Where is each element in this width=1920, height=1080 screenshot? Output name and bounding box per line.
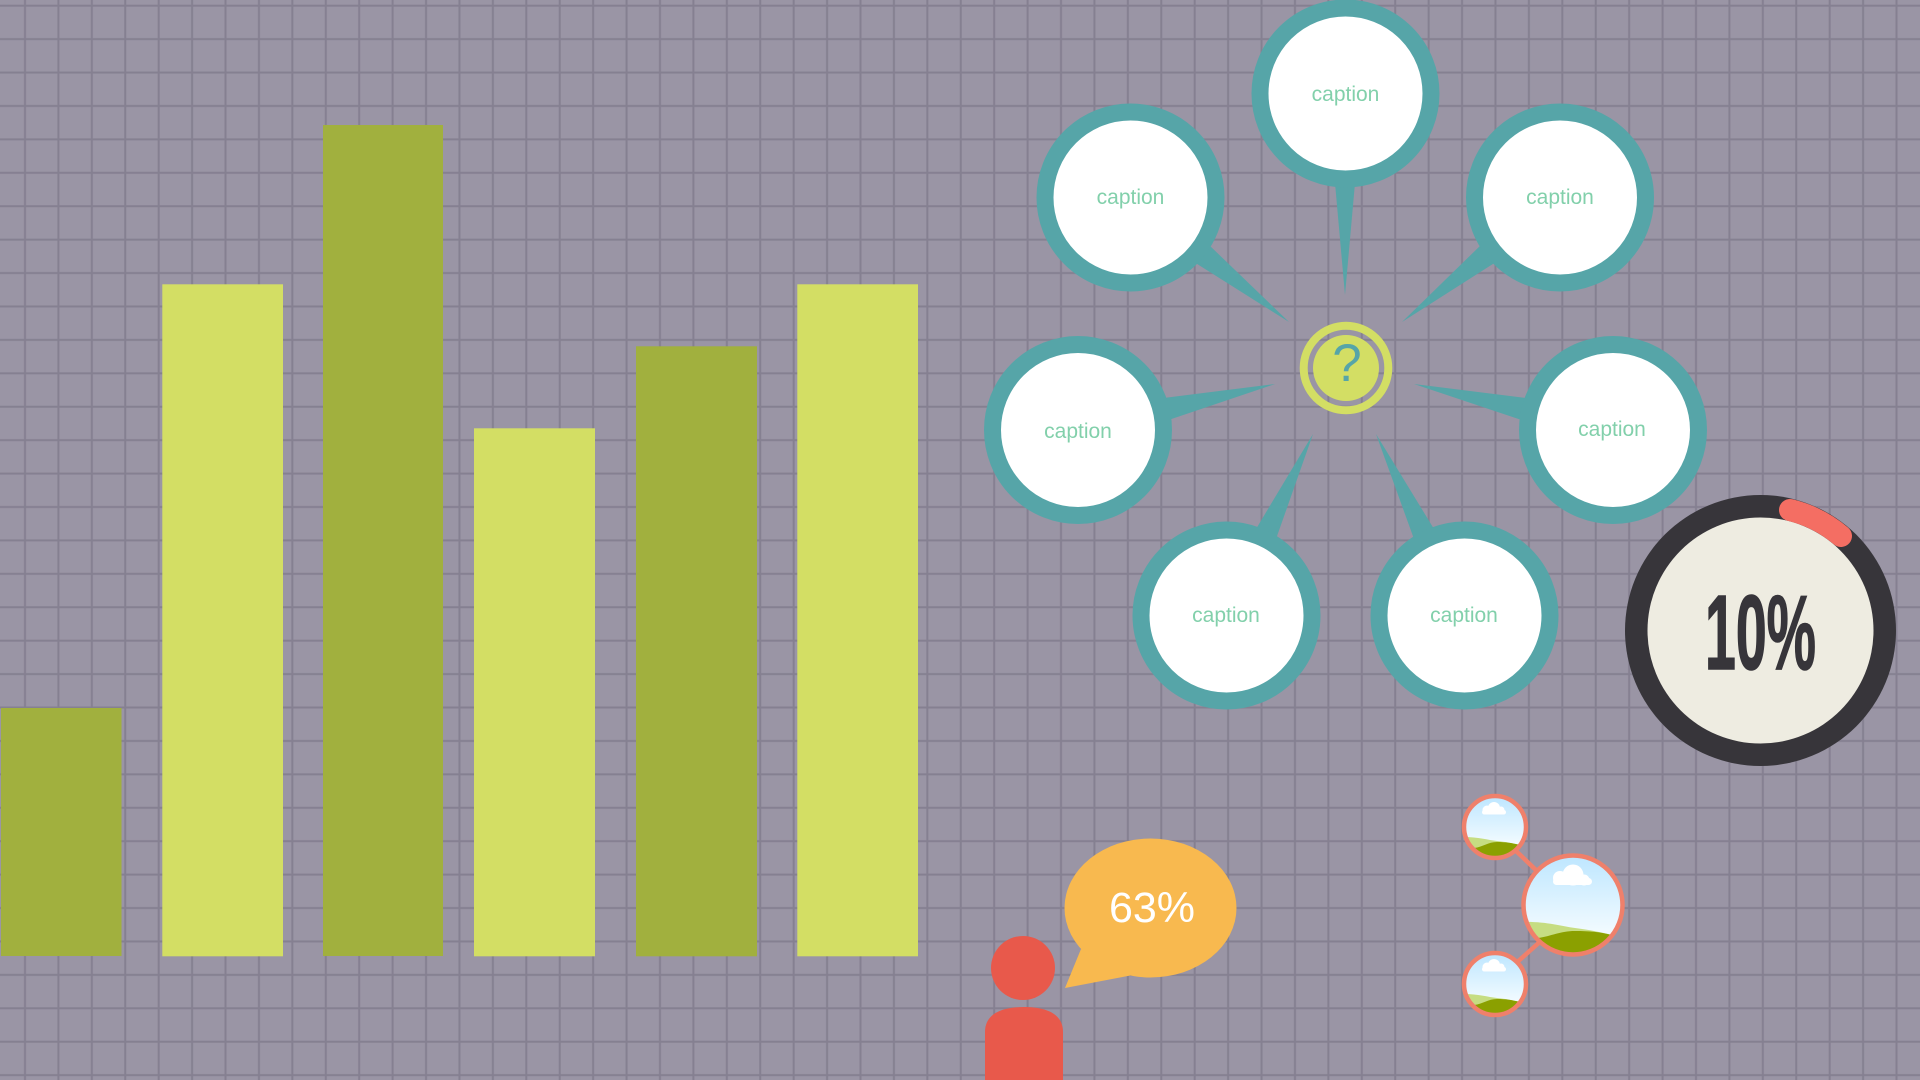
bar 2 [162,284,283,956]
bar 5 [636,346,757,956]
image network [1464,796,1623,1017]
bar 1 [1,708,122,956]
person with speech bubble [985,838,1236,1080]
bar 4 [474,428,595,956]
connectors [1515,850,1542,964]
caption bubble: bottom left [1141,434,1313,701]
caption bubble: right: caption [1578,418,1646,441]
caption bubble: bottom right: caption [1430,604,1498,627]
speech bubble [1064,838,1236,988]
gauge arc [1790,510,1841,536]
radial caption diagram [992,8,1698,701]
icon: person [985,936,1063,1080]
caption bubble: top right [1402,112,1646,322]
bar 3 [323,125,443,956]
gauge value: 10% [1705,574,1816,692]
bar chart [1,125,918,956]
icon: question mark hub: ? [1332,334,1362,393]
caption bubble: top [1260,8,1431,295]
image node: bottom [1464,953,1526,1017]
caption bubble: left: caption [1044,420,1112,443]
caption bubble: left [992,344,1275,516]
donut gauge 10% [1625,495,1896,766]
image node: large [1520,855,1623,960]
speech bubble: 63% [1109,884,1195,932]
icon: question mark hub [1304,326,1388,410]
caption bubble: top: caption [1312,83,1379,106]
caption bubble: bottom left: caption [1192,604,1260,627]
caption bubble: top left: caption [1097,186,1164,209]
caption bubble: right [1414,344,1698,516]
caption bubble: top left [1045,112,1289,322]
image node: top [1464,796,1526,860]
caption bubble: top right: caption [1526,186,1594,209]
bar 6 [797,284,918,956]
caption bubble: bottom right [1376,434,1550,701]
